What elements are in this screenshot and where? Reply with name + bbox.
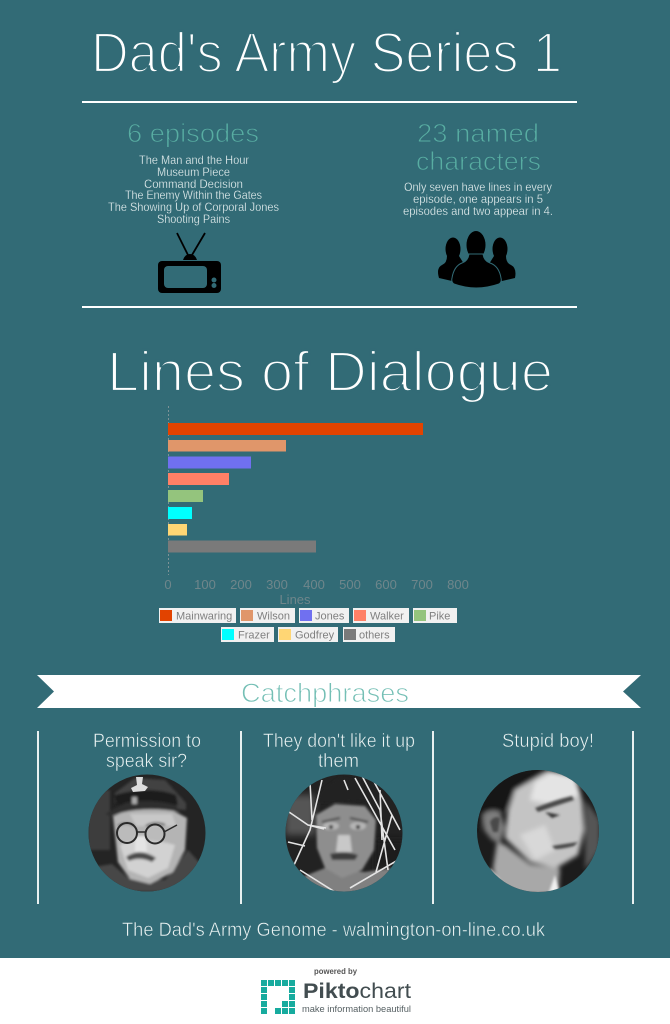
axis labels: 700 xyxy=(411,577,433,592)
axis labels: 500 xyxy=(339,577,361,592)
bars xyxy=(168,423,423,552)
portrait: Jones xyxy=(285,774,405,895)
axis labels: 600 xyxy=(375,577,397,592)
banner: catchphrases: Catchphrases xyxy=(241,678,409,708)
episode list xyxy=(108,153,279,226)
characters description xyxy=(403,180,553,218)
characters description: Only seven have lines in every xyxy=(404,180,552,194)
chart legend: Godfrey xyxy=(295,630,335,642)
panel: episodes xyxy=(108,118,279,293)
episode list: The Showing Up of Corporal Jones xyxy=(108,200,279,214)
catchphrase text: them xyxy=(318,751,359,772)
episode list: Command Decision xyxy=(144,177,243,191)
panel: permission to speak sir xyxy=(88,731,206,892)
axis labels: 800 xyxy=(447,577,469,592)
panel: stupid boy xyxy=(477,731,600,895)
episode list: The Man and the Hour xyxy=(139,153,249,167)
episode list: Shooting Pains xyxy=(157,212,230,226)
catchphrase text xyxy=(93,731,201,772)
chart legend: others xyxy=(359,630,390,642)
characters description: episode, one appears in 5 xyxy=(413,192,543,206)
catchphrase text xyxy=(263,731,415,772)
panel: characters xyxy=(403,118,553,288)
characters description: episodes and two appear in 4. xyxy=(403,204,553,218)
axis labels: 200 xyxy=(230,577,252,592)
characters heading: characters xyxy=(416,146,541,176)
axis labels: 0 xyxy=(164,577,172,592)
axis labels: Lines xyxy=(279,592,311,607)
chart legend: Jones xyxy=(315,610,345,622)
panel: they don't like it up them xyxy=(263,731,415,895)
episodes heading: 6 episodes xyxy=(127,118,259,148)
piktochart wordmark: Piktochart xyxy=(303,980,411,1003)
axis labels: 400 xyxy=(303,577,325,592)
chart legend: Frazer xyxy=(238,630,270,642)
catchphrase text: Permission to xyxy=(93,731,201,752)
footer credit: The Dad's Army Genome - walmington-on-line.co.uk xyxy=(122,920,545,941)
chart legend: Walker xyxy=(370,610,404,622)
portrait: Pike xyxy=(477,770,600,895)
icon: television xyxy=(158,233,221,293)
catchphrase text: speak sir? xyxy=(106,751,187,772)
catchphrase text: They don't like it up xyxy=(263,731,415,752)
axis labels: 100 xyxy=(194,577,216,592)
powered by: powered by xyxy=(314,966,357,976)
bar chart xyxy=(164,406,469,607)
chart legend xyxy=(159,608,457,642)
axis labels xyxy=(164,577,469,607)
chart legend: Pike xyxy=(429,610,450,622)
banner: catchphrases xyxy=(37,675,641,708)
axis labels: 300 xyxy=(266,577,288,592)
characters heading: 23 named xyxy=(417,118,539,148)
title: Dad's Army Series 1 xyxy=(91,21,562,85)
catchphrase text: Stupid boy! xyxy=(502,731,594,752)
episode list: Museum Piece xyxy=(157,165,230,179)
episode list: The Enemy Within the Gates xyxy=(125,188,262,202)
characters heading xyxy=(416,118,541,176)
heading: lines of dialogue: Lines of Dialogue xyxy=(107,340,553,404)
icon: piktochart logo xyxy=(261,980,295,1014)
chart legend: Mainwaring xyxy=(176,610,232,622)
icon: group of people xyxy=(438,231,516,288)
portrait: Mainwaring xyxy=(88,774,206,892)
tagline: make information beautiful xyxy=(302,1004,411,1015)
panel: piktochart footer xyxy=(0,958,670,1024)
chart legend: Wilson xyxy=(257,610,290,622)
